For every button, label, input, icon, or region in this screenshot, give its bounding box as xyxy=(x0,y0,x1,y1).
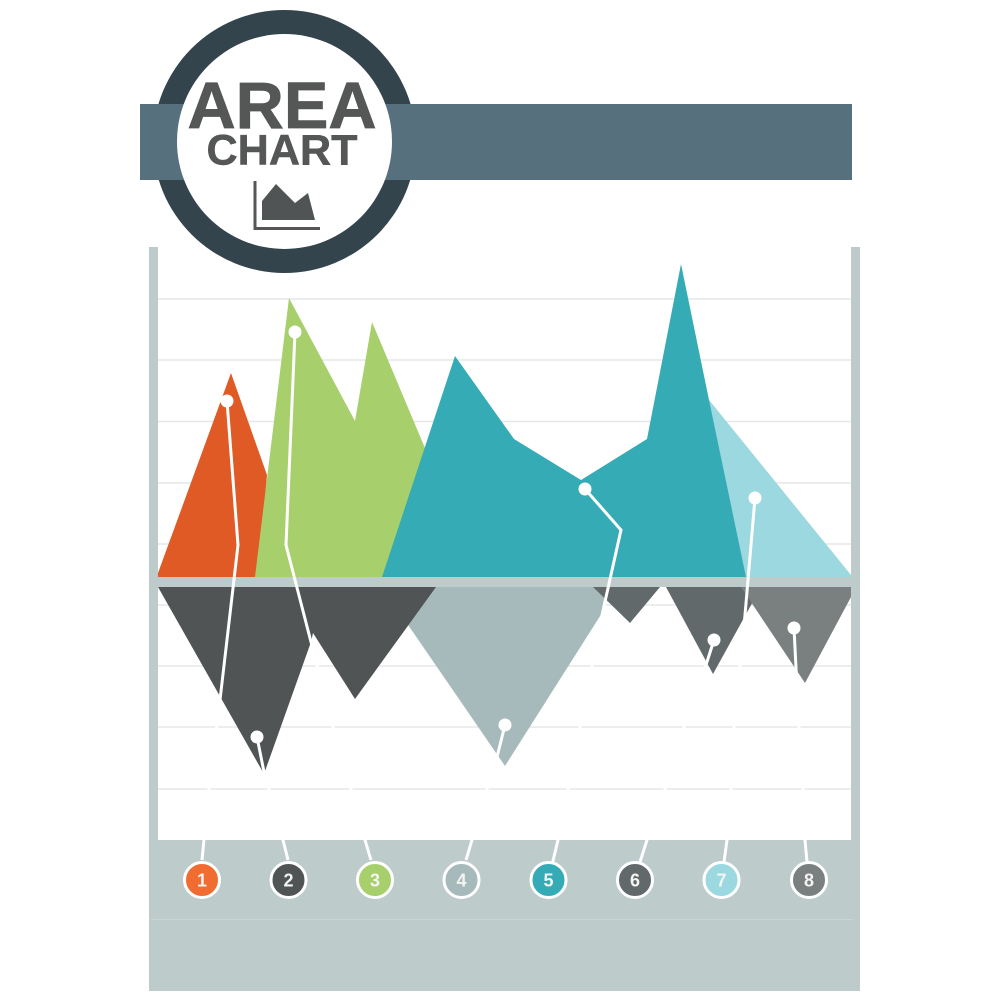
legend badge 2 xyxy=(271,862,306,898)
legend badge 6 xyxy=(618,862,652,898)
legend badge 3 xyxy=(358,862,392,898)
legend badge 1: 1 xyxy=(197,870,207,890)
header banner xyxy=(140,104,852,180)
area: series 7 light blue xyxy=(705,395,851,577)
upper area chart xyxy=(158,264,851,577)
legend badge 1 xyxy=(184,862,220,898)
area: series 2 dark xyxy=(158,587,436,774)
legend badge 5: 5 xyxy=(543,870,554,890)
title: AREA: AREA xyxy=(188,68,376,142)
icon: area chart xyxy=(254,181,320,230)
area: series 6 grey, centre xyxy=(593,587,660,623)
legend badge 4: 4 xyxy=(456,870,467,890)
legend badge 7 xyxy=(704,862,739,898)
leader line and pin 7 xyxy=(724,492,762,862)
legend badge 5 xyxy=(531,862,566,898)
leader line and pin 5 xyxy=(552,482,621,865)
legend badge 7: 7 xyxy=(716,870,727,890)
title: CHART: CHART xyxy=(206,128,358,174)
leader line and pin 3 xyxy=(286,326,371,860)
leader line and pin 1 xyxy=(202,394,238,860)
lower area chart xyxy=(158,587,851,774)
area: series 1 orange xyxy=(158,373,267,577)
legend badge 8 xyxy=(792,862,826,898)
legend badge 6: 6 xyxy=(630,870,640,890)
area: series 3 green xyxy=(255,298,430,577)
leader line and pin 6 xyxy=(640,634,720,862)
legend badge 2: 2 xyxy=(283,870,294,890)
header ring xyxy=(153,10,416,273)
title badge xyxy=(177,34,392,249)
area: series 6 grey, right xyxy=(666,587,761,674)
legend badge 8: 8 xyxy=(804,870,814,890)
legend badge 4 xyxy=(444,862,479,898)
leader line and pin 2 xyxy=(250,730,288,860)
legend badge 3: 3 xyxy=(370,870,380,890)
area: series 4 sage xyxy=(382,587,608,766)
leader line and pin 8 xyxy=(788,622,807,862)
area: series 8 grey xyxy=(741,587,851,683)
area: series 5 teal xyxy=(382,264,746,577)
leader line and pin 4 xyxy=(466,718,512,860)
axis baseline xyxy=(158,577,851,587)
panel: frame and footer xyxy=(149,247,860,991)
